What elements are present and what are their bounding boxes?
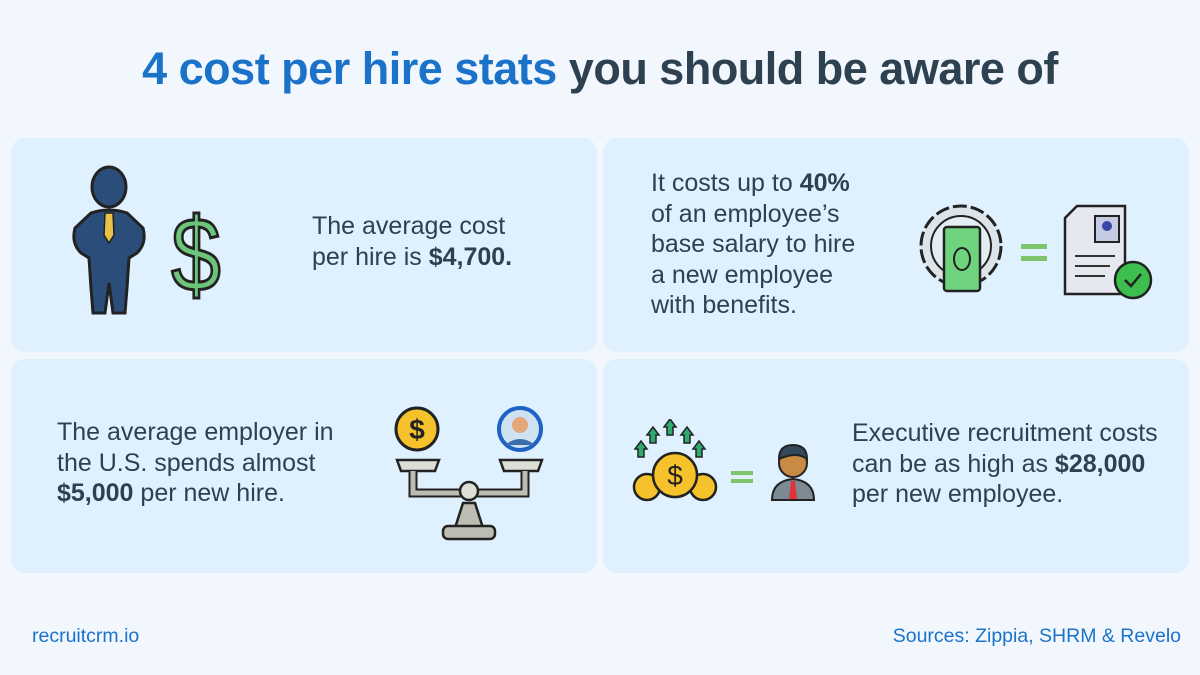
text: average cost: The average cost: [312, 212, 505, 240]
text: 40%: base salary to hire: [651, 230, 855, 258]
icon: coins equals executive: $: [667, 460, 683, 491]
icon: businessman with dollar sign: $: [171, 196, 221, 314]
text: 40%: a new employee: [651, 260, 833, 288]
footer: brand: recruitcrm.io: [32, 625, 139, 647]
panel: 40% of base salary: [603, 138, 1189, 352]
icon: gear money equals resume: [920, 204, 1152, 300]
text: $28,000: [852, 419, 1158, 508]
text: 40%: [651, 169, 855, 319]
text: $5,000: The average employer in: [57, 418, 334, 446]
icon: balance scale: [394, 406, 544, 540]
text: $5,000: [57, 418, 334, 507]
title: 4 cost per hire stats you should be aware of: [142, 43, 1058, 94]
text: $28,000: can be as high as $28,000: [852, 450, 1145, 478]
footer: sources: Sources: Zippia, SHRM & Revelo: [893, 625, 1181, 647]
icon: businessman with dollar sign: [72, 166, 221, 314]
text: 40%: with benefits.: [651, 291, 797, 319]
text: $5,000: $5,000 per new hire.: [57, 479, 285, 507]
text: 40%: of an employee’s: [651, 200, 840, 228]
panel: average cost per hire: [11, 138, 597, 352]
text: $5,000: the U.S. spends almost: [57, 448, 315, 476]
text: average cost: [312, 212, 512, 270]
text: $28,000: per new employee.: [852, 480, 1063, 508]
icon: balance scale: $: [409, 414, 425, 445]
panel: executive recruitment: [603, 359, 1189, 573]
text: $28,000: Executive recruitment costs: [852, 419, 1158, 447]
text: 40%: It costs up to 40%: [651, 169, 850, 197]
icon: coins equals executive: [632, 419, 815, 502]
panel: average employer spends: [11, 359, 597, 573]
text: average cost: per hire is $4,700.: [312, 242, 512, 270]
